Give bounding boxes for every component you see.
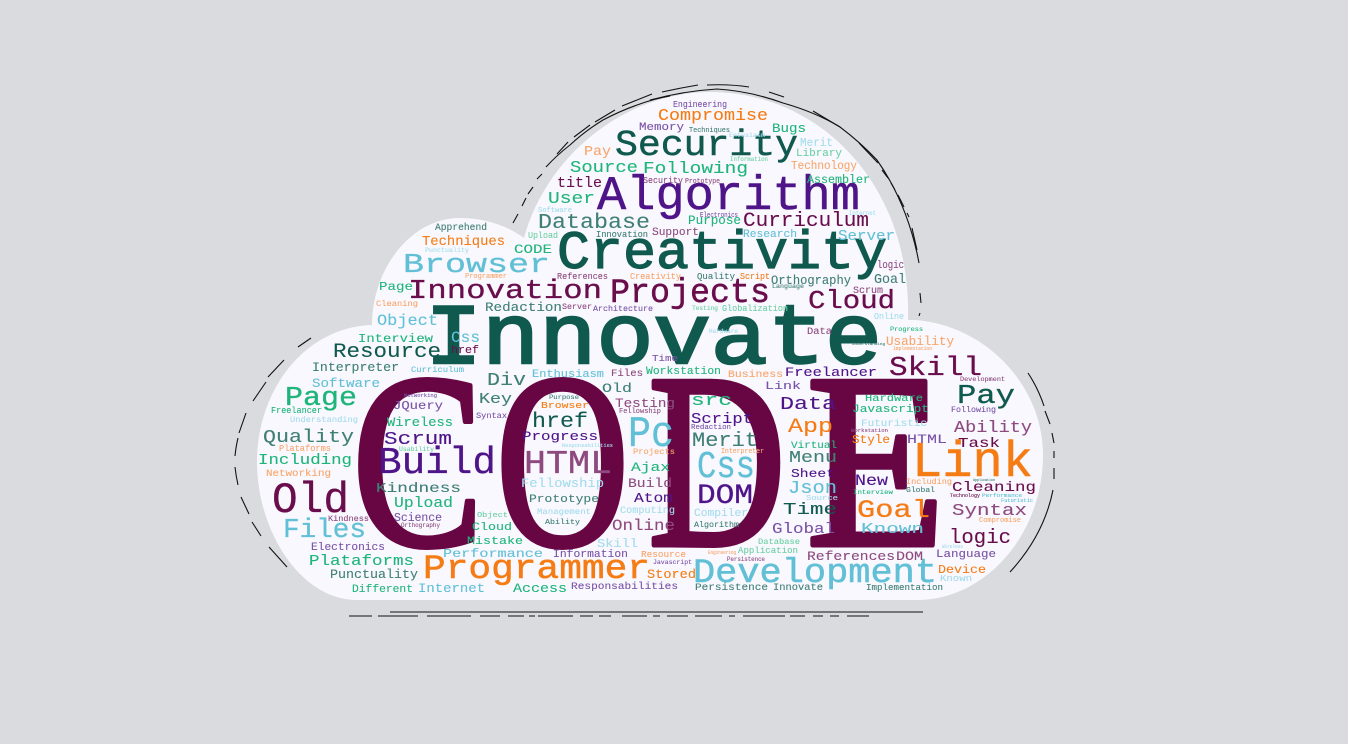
words: centre: Innovate — [773, 583, 823, 594]
main word: Page: Page — [285, 384, 357, 414]
words: upper lobe: Curriculum — [743, 210, 869, 233]
words: right lobe: HTML — [907, 432, 947, 447]
words: left lobe: Curriculum — [411, 366, 464, 375]
words: upper lobe: CODE — [514, 242, 552, 257]
words: upper lobe: References — [557, 272, 608, 282]
main word: CODE: D — [648, 323, 786, 600]
main word: Link: Link — [912, 435, 1033, 492]
words: centre: Cloud — [472, 522, 512, 534]
words: right lobe: Data — [780, 395, 836, 415]
words: upper lobe: Upload — [528, 231, 558, 241]
words: left lobe: Css — [451, 329, 480, 347]
words: right lobe: Time — [783, 501, 837, 520]
words: left lobe: Interview — [358, 332, 434, 346]
words: upper lobe: Compromise — [658, 107, 768, 126]
words: centre: Projects — [633, 448, 675, 457]
words: upper lobe: Internet — [849, 210, 876, 217]
words: left lobe: Usability — [399, 446, 434, 453]
words: centre: Algorithm — [694, 521, 739, 530]
words: right lobe: Global — [906, 487, 935, 495]
words: centre: Purpose — [549, 394, 579, 401]
words: upper lobe: Quality — [697, 272, 736, 282]
words: upper lobe: Engineering — [673, 100, 727, 110]
words: centre: Fellowship — [521, 476, 604, 491]
words: centre: Progress — [522, 429, 598, 444]
words: centre: Enthusiasm — [532, 369, 604, 381]
words: upper lobe: Programmer — [465, 273, 507, 281]
words: upper lobe: Language — [772, 283, 804, 290]
words: centre: Application — [738, 546, 798, 556]
words: centre: Interpreter — [721, 448, 764, 456]
words: right lobe: Technology — [950, 493, 980, 499]
words: centre: Fellowship — [619, 408, 661, 416]
main word: Projects: Projects — [610, 275, 770, 313]
words: centre: Persistence — [727, 556, 765, 563]
words: upper lobe: Online — [874, 312, 904, 322]
words: right lobe: Menu — [789, 449, 837, 468]
main word: CODE: C — [352, 323, 484, 600]
words: right lobe — [765, 326, 1036, 593]
words: left lobe: Kindness — [328, 515, 369, 524]
main word: Goal: Goal — [857, 496, 930, 525]
words: upper lobe: Goal — [874, 272, 906, 288]
words: upper lobe: Page — [379, 280, 413, 294]
words: centre: Key — [479, 391, 512, 408]
main word: Innovate: Innovate — [425, 292, 882, 389]
words: right lobe: Javascript — [852, 404, 929, 416]
words: upper lobe: title — [557, 175, 602, 192]
words: right lobe: Usability — [886, 334, 954, 349]
main word: DOM: DOM — [697, 481, 753, 512]
words: centre: Object — [477, 512, 508, 520]
words: upper lobe: Architecture — [593, 305, 653, 314]
words: right lobe: Implementation — [893, 346, 932, 352]
words: upper lobe: Security — [643, 176, 684, 186]
main word: Build: Build — [378, 442, 496, 485]
words: right lobe: Development — [960, 376, 1005, 383]
words: upper lobe: Apprehend — [435, 222, 487, 234]
main word: Algorithm: Algorithm — [597, 170, 860, 224]
dashed cloud outline — [235, 85, 1054, 616]
words: upper lobe: Electronics — [700, 212, 738, 220]
words: right lobe: Compromise — [979, 517, 1021, 525]
words: upper lobe: Technology — [791, 159, 857, 173]
words: upper lobe: Entusiasm — [729, 132, 765, 139]
words: centre: Testing — [615, 396, 675, 411]
words: upper lobe: Server — [838, 228, 895, 245]
words: centre: Javascript — [653, 559, 692, 566]
words: centre: Atom — [634, 491, 673, 507]
words: right lobe: DOM — [896, 549, 923, 564]
words: left lobe: Networking — [266, 468, 331, 480]
words: right lobe: App — [788, 416, 833, 439]
main word: Files: Files — [283, 516, 366, 546]
words: centre: Responsabilities — [571, 581, 678, 593]
words: upper lobe: Scrum — [853, 286, 883, 297]
words: upper lobe: Hardware — [709, 328, 738, 335]
words: right lobe: Futuristic — [861, 418, 927, 430]
words: left lobe: Scrum — [384, 430, 452, 450]
words: upper lobe: Assembler — [807, 173, 870, 187]
words: upper lobe: Library — [796, 148, 842, 160]
words: centre: Syntax — [476, 412, 507, 421]
main word: Browser: Browser — [403, 251, 550, 281]
words: upper lobe: Script — [740, 272, 770, 282]
words: upper lobe: Techniques — [689, 127, 730, 135]
words: right lobe: Following — [951, 406, 996, 415]
words: upper lobe: Creativity — [630, 272, 682, 282]
main word: Pc: Pc — [628, 410, 674, 460]
words: upper lobe: Prototype — [685, 178, 720, 186]
words: right lobe: Including — [906, 478, 952, 487]
words: centre: Information — [553, 549, 628, 561]
words: left lobe: Quality — [263, 428, 354, 448]
words: upper lobe: Testing — [692, 305, 718, 312]
words: centre: Skill — [597, 537, 638, 551]
main word: Security: Security — [615, 125, 798, 166]
words: upper lobe: Database — [538, 212, 650, 235]
words: centre: Mistake — [467, 536, 523, 548]
words: centre: Ability — [545, 519, 580, 527]
main word: Programmer: Programmer — [423, 551, 650, 589]
words: centre: href — [532, 411, 588, 434]
words: left lobe: Wireless — [387, 415, 453, 430]
main word: HTML: HTML — [524, 446, 612, 483]
words: left lobe: Science — [394, 511, 442, 525]
main word: Old: Old — [272, 476, 349, 526]
words: centre: Time — [652, 354, 678, 364]
words: centre: Old — [602, 381, 632, 396]
words: upper lobe: Bugs — [772, 121, 806, 136]
words: right lobe: Known — [861, 521, 924, 538]
words: left lobe: Kindness — [376, 481, 461, 497]
main word: Pay: Pay — [957, 382, 1015, 412]
words: centre: Compiler — [694, 508, 748, 520]
words: right lobe: Virtual — [791, 440, 837, 452]
words: right lobe: Global — [772, 521, 835, 538]
words: centre: Resource — [641, 550, 686, 560]
words: upper lobe: Support — [652, 227, 699, 239]
words: left lobe: Interpreter — [312, 360, 399, 375]
words: upper lobe: Following — [643, 160, 748, 179]
words: right lobe: Futuristic — [1001, 498, 1033, 504]
words: centre: Engineering — [708, 550, 736, 556]
words: centre: Build — [628, 476, 672, 491]
words: right lobe: Language — [936, 549, 996, 561]
words: left lobe: Upload — [394, 495, 453, 512]
words: upper lobe: Cleaning — [376, 300, 418, 309]
words: left lobe: Internet — [418, 581, 485, 596]
words: left lobe: Networking — [404, 392, 437, 399]
words: centre: Persistence — [695, 582, 768, 594]
words: upper lobe: Purpose — [688, 213, 741, 228]
words: centre: Responsabilities — [562, 443, 613, 449]
words: right lobe: Cleaning — [952, 480, 1036, 496]
words: upper lobe: Merit — [800, 136, 833, 150]
words: right lobe: References — [807, 549, 895, 564]
words: right lobe: Wireless — [942, 544, 963, 550]
words: upper lobe: User — [548, 190, 595, 209]
words: left lobe: href — [451, 345, 479, 357]
words: centre: Database — [758, 538, 800, 547]
words: right lobe: Ability — [954, 419, 1032, 438]
words: upper lobe: Information — [730, 156, 768, 163]
words: centre: Computing — [620, 505, 675, 517]
words: right lobe: Syntax — [952, 502, 1027, 521]
words: upper lobe: Globalization — [722, 304, 788, 314]
words: right lobe: Source — [806, 495, 838, 503]
words: left lobe: Different — [352, 584, 413, 596]
words: centre: src — [691, 392, 732, 411]
words: right lobe: Understanding — [852, 342, 886, 347]
words: right lobe: Application — [973, 478, 995, 483]
words: centre: Ajax — [631, 460, 670, 475]
words: upper lobe: Data — [807, 327, 832, 338]
words: left lobe: Plataforms — [309, 553, 414, 570]
words: centre: Freelancer — [785, 365, 877, 380]
words: right lobe: Interview — [853, 489, 893, 496]
words: centre: Script — [691, 411, 753, 428]
words: left lobe: Software — [312, 376, 380, 391]
words: upper lobe: Pay — [584, 144, 611, 160]
words: right lobe: Implementation — [866, 583, 943, 593]
words: upper lobe: Research — [743, 229, 797, 241]
words: right lobe: Progress — [890, 326, 923, 333]
words: upper lobe: Orthography — [771, 273, 851, 288]
words: upper lobe: Techniques — [422, 234, 505, 250]
words: left lobe: Including — [258, 452, 352, 469]
words: right lobe: Hardware — [865, 393, 923, 405]
words: upper lobe — [376, 100, 906, 338]
words: left lobe: Orthography — [401, 522, 440, 529]
main word: Innovation: Innovation — [408, 277, 602, 307]
main word: Cloud: Cloud — [808, 286, 895, 316]
words: centre: Redaction — [691, 424, 731, 432]
words: right lobe: Task — [958, 436, 1000, 452]
words: upper lobe: Memory — [639, 122, 684, 134]
words: centre: Prototype — [529, 494, 599, 506]
words: centre: Merit — [692, 430, 758, 453]
main word: Creativity: Creativity — [557, 224, 887, 285]
words: left lobe: Punctuality — [330, 567, 418, 582]
cloud shape — [257, 92, 1043, 600]
words: upper lobe: Server — [562, 303, 592, 312]
words: right lobe: Performance — [982, 493, 1022, 499]
words: centre — [443, 354, 877, 596]
words: centre: Access — [513, 581, 567, 596]
words: upper lobe: Redaction — [485, 300, 562, 315]
words: left lobe: JQuery — [393, 399, 443, 413]
words: centre: Performance — [443, 547, 543, 561]
words: centre: Business — [728, 369, 783, 381]
main word: CODE — [352, 323, 946, 600]
words: upper lobe: logic — [877, 260, 904, 272]
words: left lobe: Resource — [333, 341, 441, 364]
words: right lobe: Sheet — [791, 467, 835, 481]
words: right lobe: New — [855, 472, 888, 490]
words: left lobe: Understanding — [290, 416, 358, 425]
main word: CODE: O — [496, 323, 629, 600]
words: right lobe: Device — [938, 563, 986, 577]
words: centre: Management — [537, 508, 591, 517]
words: left lobe: Electronics — [311, 542, 385, 554]
main word: Skill: Skill — [889, 354, 982, 384]
words: centre: Workstation — [646, 366, 721, 378]
words: upper lobe: Punctuality — [425, 247, 469, 254]
words: right lobe: Json — [788, 479, 837, 499]
words: upper lobe: Innovation — [596, 230, 648, 240]
words: upper lobe: Source — [570, 159, 638, 178]
words: right lobe: logic — [949, 527, 1011, 550]
words: left lobe: Freelancer — [271, 406, 322, 416]
words: centre: Stored — [647, 567, 696, 582]
words: right lobe: Workstation — [851, 428, 888, 434]
words: right lobe: Style — [852, 433, 890, 447]
words: left lobe — [258, 329, 485, 596]
main word: CODE: E — [806, 323, 946, 600]
words: centre: Online — [612, 517, 675, 535]
words: left lobe: Plataforms — [279, 444, 331, 454]
words: upper lobe: Object — [377, 312, 438, 330]
main word: Development: Development — [693, 555, 937, 593]
words: upper lobe: Software — [538, 207, 572, 215]
words: right lobe: Known — [940, 574, 972, 584]
words: centre: Div — [487, 371, 526, 391]
words: right lobe: Link — [765, 381, 802, 393]
words: centre: Browser — [541, 401, 589, 411]
main word: Css: Css — [697, 446, 755, 489]
words: centre: Files — [611, 368, 643, 380]
